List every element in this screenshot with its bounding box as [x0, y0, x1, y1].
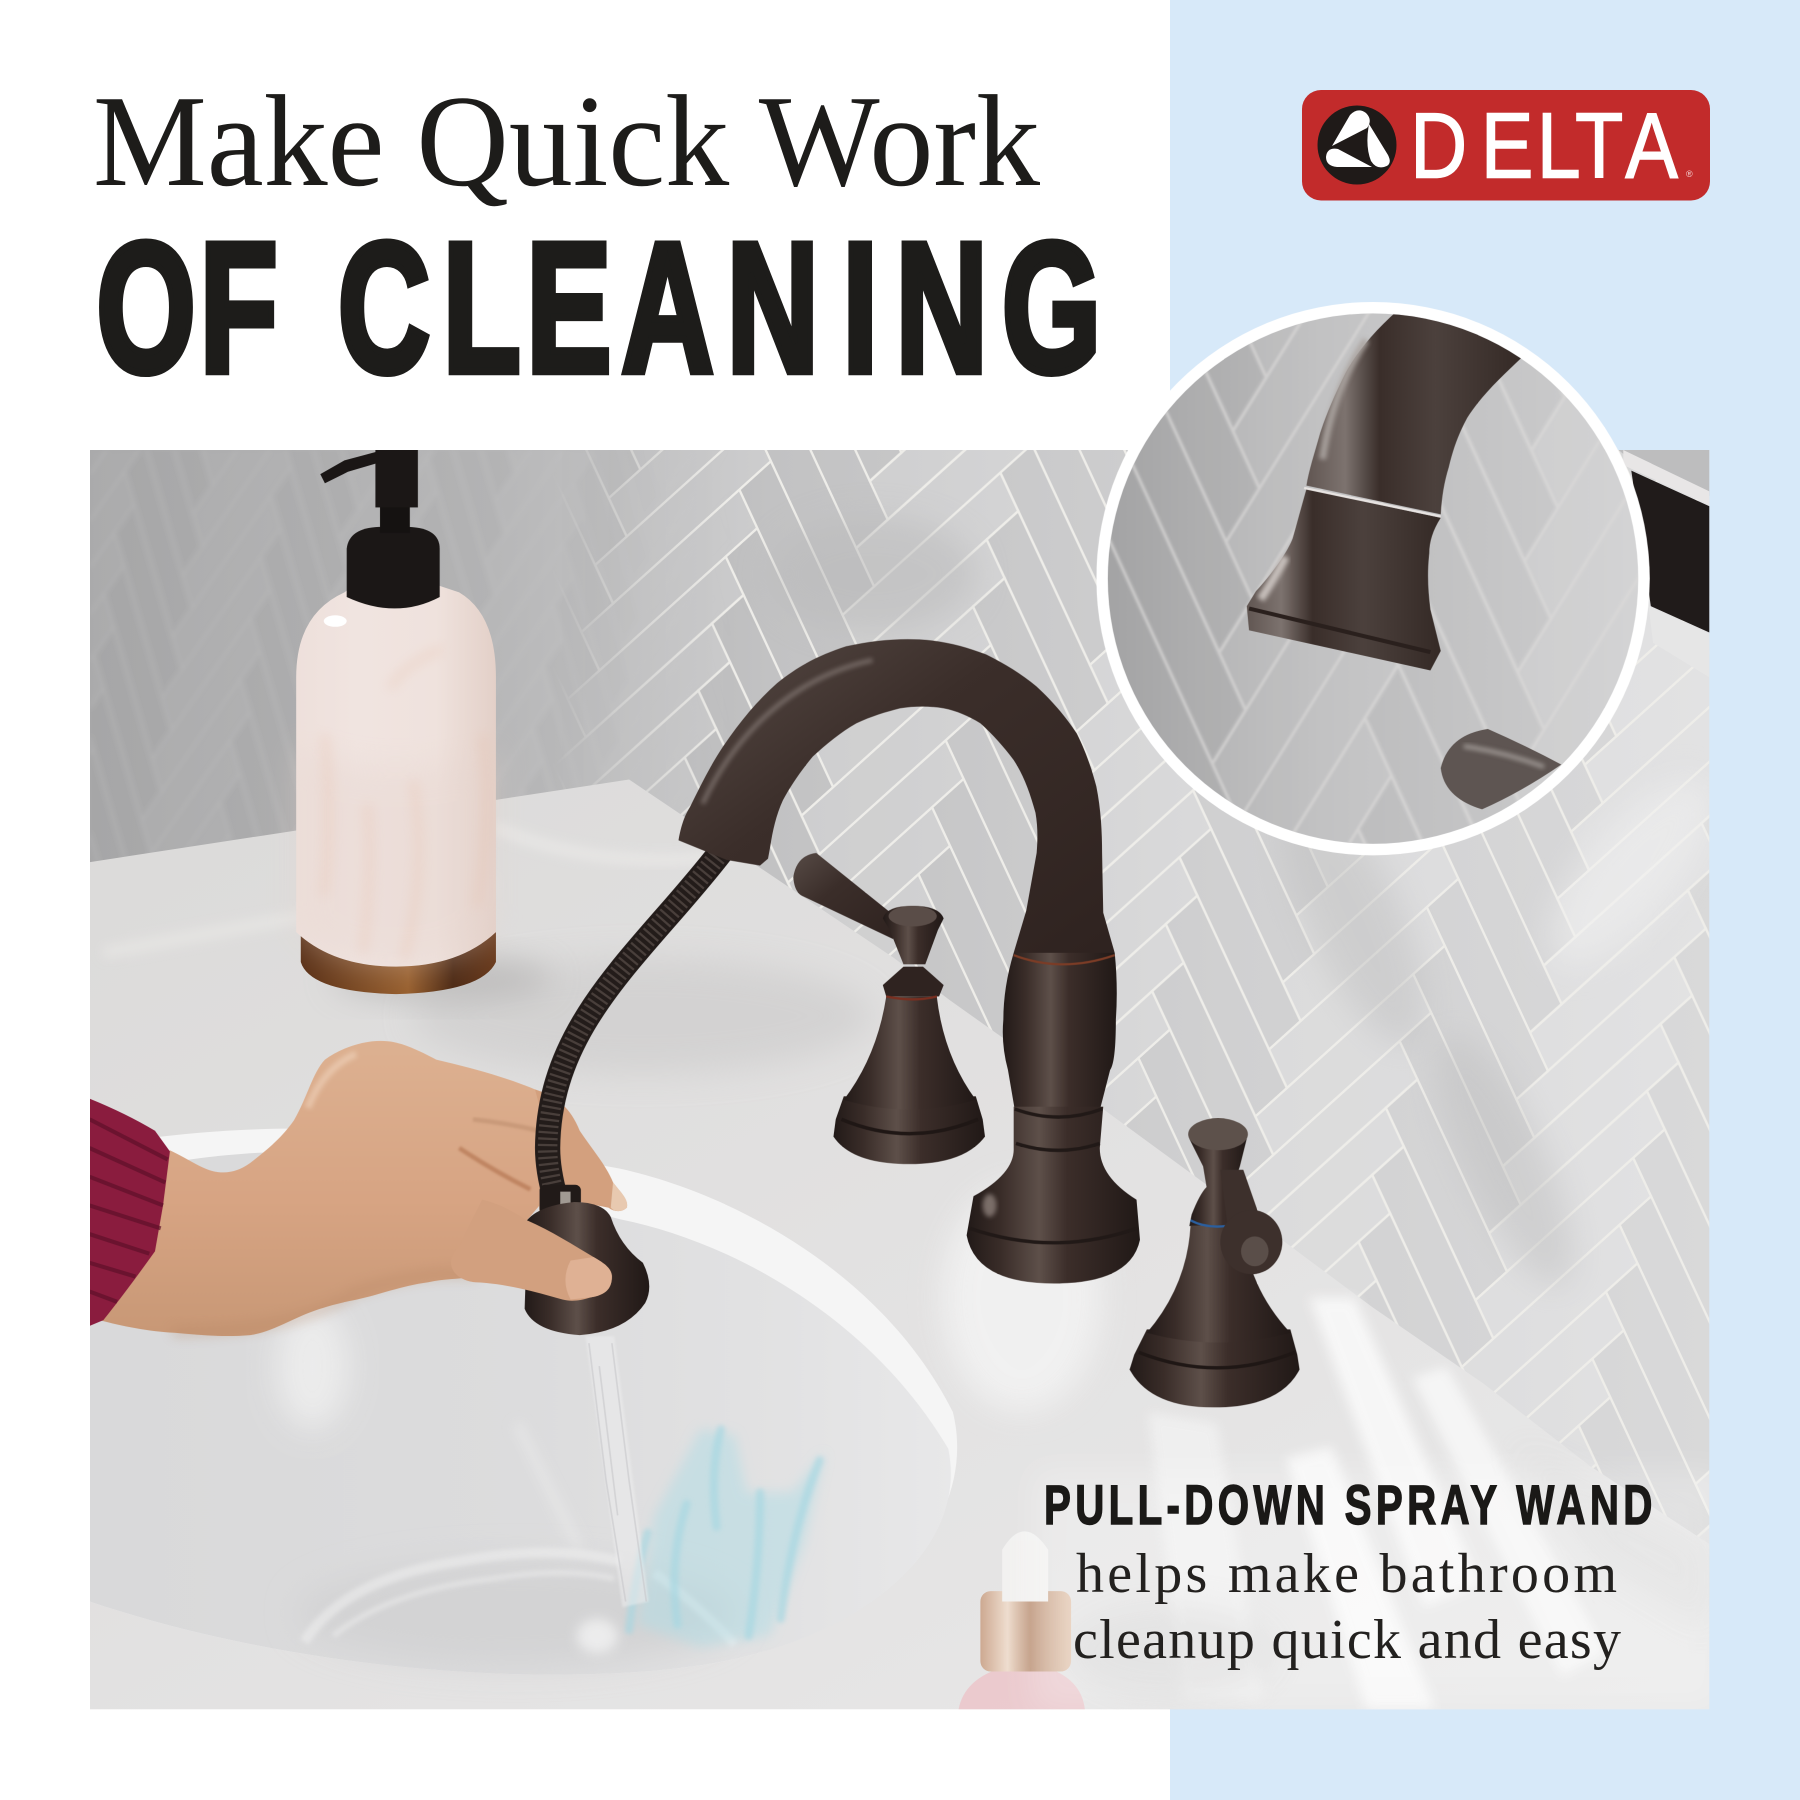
caption: PULL-DOWN SPRAY WAND — [1044, 1475, 1657, 1537]
red sweater cuff — [90, 1099, 170, 1326]
title: OF CLEANING — [96, 204, 1101, 411]
caption — [1044, 1475, 1657, 1671]
marble countertop — [90, 779, 1709, 1709]
braided hose — [548, 852, 721, 1199]
caption: cleanup quick and easy — [1073, 1609, 1621, 1671]
faucet left handle — [793, 853, 985, 1164]
title: Make Quick Work — [93, 69, 1040, 214]
blue side panel — [1170, 0, 1800, 1800]
thumb over wand — [455, 1220, 612, 1301]
serum bottle — [959, 1531, 1085, 1709]
pull-down spray wand head — [525, 1185, 649, 1335]
inset: spout close-up circle — [1096, 302, 1650, 855]
inset contents — [1102, 310, 1642, 850]
mirror edge behind inset — [1619, 450, 1709, 677]
logo: Delta: DELTA — [1410, 94, 1678, 198]
title — [93, 69, 1101, 411]
sink basin — [90, 1129, 957, 1675]
fingers behind hose — [535, 1089, 627, 1217]
hand — [100, 1041, 551, 1336]
logo: Delta: ® — [1686, 169, 1693, 179]
faucet right handle — [1130, 1118, 1300, 1407]
photo: bathroom sink scene — [90, 450, 1739, 1711]
faucet spout and body — [678, 639, 1140, 1283]
reflection of tile on counter — [944, 1215, 1598, 1710]
blue soap splash — [629, 1429, 824, 1647]
soap dispenser — [296, 450, 551, 1001]
soft light behind caption — [1033, 1469, 1722, 1711]
water stream — [585, 1336, 649, 1607]
tiled wall — [90, 450, 1739, 1598]
caption: helps make bathroom — [1076, 1543, 1617, 1605]
logo: Delta — [1302, 90, 1710, 200]
